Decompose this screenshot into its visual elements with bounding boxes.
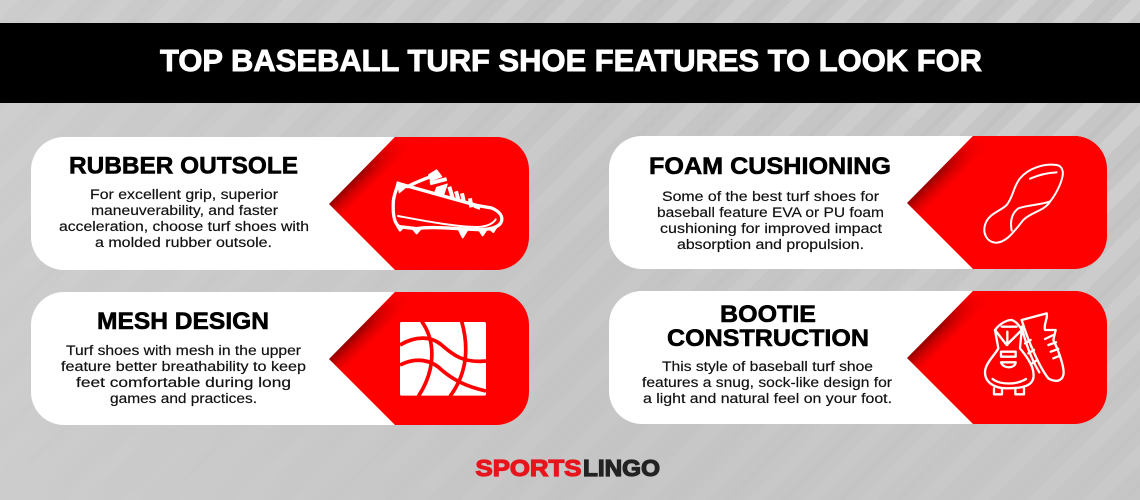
logo: SportsLingo: LINGO [583, 455, 660, 481]
panel: foam cushioning [609, 136, 1107, 269]
heading: rubber outsole: RUBBER OUTSOLE [69, 152, 298, 180]
panel: mesh design [31, 292, 529, 425]
text: rubber outsole description: maneuverability, and faster [91, 203, 278, 219]
icon: insole [984, 165, 1063, 243]
icon: cleat shoe [393, 170, 502, 237]
text: bootie construction description [642, 359, 892, 407]
heading: bootie construction: BOOTIE [720, 301, 816, 328]
heading: foam cushioning: FOAM CUSHIONING [649, 153, 891, 180]
heading: bootie construction [667, 301, 869, 352]
logo: SportsLingo [476, 455, 660, 481]
panel: bootie construction [609, 291, 1107, 424]
text: mesh design description: feature better breathability to keep [61, 359, 306, 375]
text: mesh design description: feet comfortable during long [76, 375, 291, 391]
logo: SportsLingo: SPORTS [476, 455, 582, 481]
text: foam cushioning description: Some of the best turf shoes for [662, 189, 879, 205]
panel: rubber outsole [31, 137, 529, 270]
text: rubber outsole description: a molded rubber outsole. [95, 235, 272, 251]
icon: pair of cleats [985, 313, 1064, 394]
text: rubber outsole description: For excellent grip, superior [90, 187, 278, 203]
text: foam cushioning description: baseball feature EVA or PU foam [657, 205, 884, 221]
text: bootie construction description: features a snug, sock-like design for [642, 375, 892, 391]
text: foam cushioning description: absorption and propulsion. [677, 237, 864, 253]
title banner: TOP BASEBALL TURF SHOE FEATURES TO LOOK FOR [160, 43, 982, 78]
heading: mesh design: MESH DESIGN [97, 308, 269, 335]
text: bootie construction description: This style of baseball turf shoe [662, 359, 873, 375]
icon: mesh panel [400, 321, 486, 396]
text: mesh design description: games and practices. [110, 391, 257, 407]
background [1071, 0, 1140, 23]
text: mesh design description [61, 343, 306, 407]
text: rubber outsole description [59, 187, 309, 251]
text: foam cushioning description: cushioning for improved impact [660, 221, 882, 237]
title banner [0, 23, 1140, 103]
text: foam cushioning description [657, 189, 884, 253]
text: rubber outsole description: acceleration, choose turf shoes with [59, 219, 309, 235]
heading: bootie construction: CONSTRUCTION [667, 325, 869, 352]
text: mesh design description: Turf shoes with mesh in the upper [66, 343, 301, 359]
text: bootie construction description: a light and natural feel on your foot. [643, 391, 892, 407]
